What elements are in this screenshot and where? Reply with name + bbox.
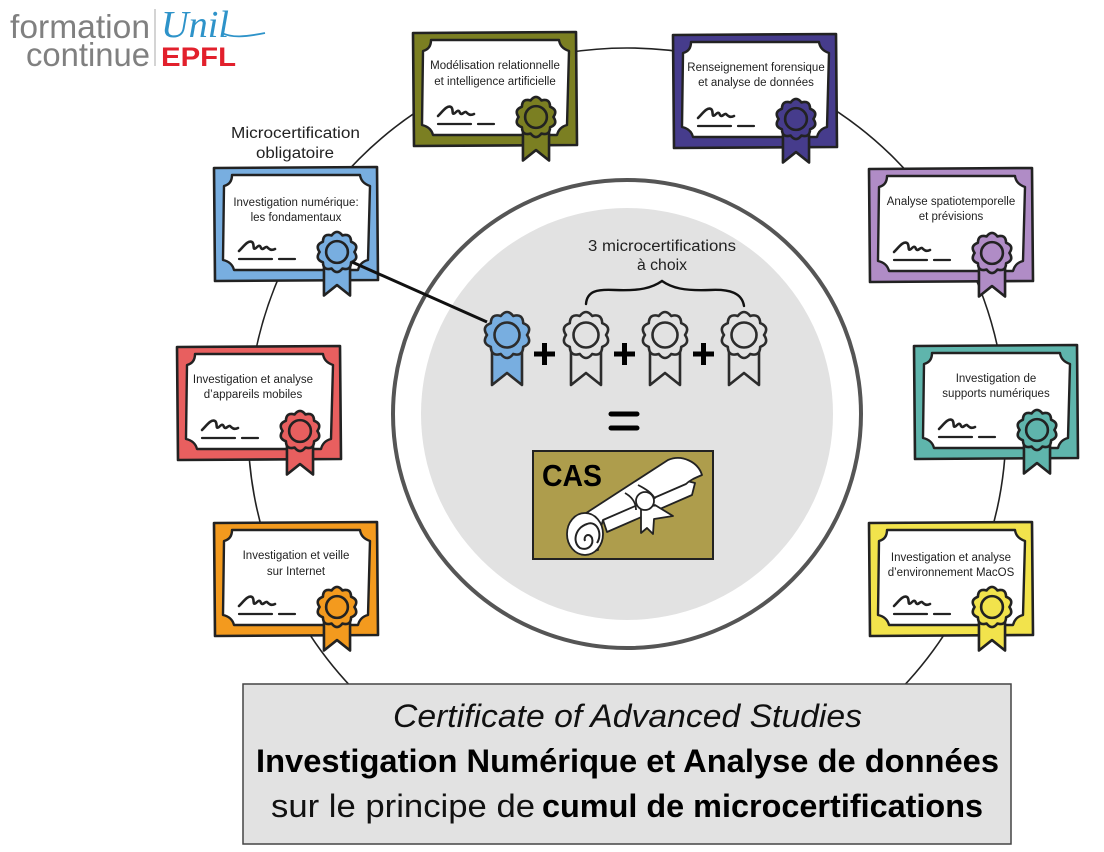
certificate: Renseignement forensique: et analyse de données (698, 77, 814, 89)
bottom title panel (243, 684, 1011, 844)
certificate: environnement MacOS: Investigation et analyse (891, 552, 1011, 564)
certificate: Investigation numérique (mandatory): les fondamentaux (251, 212, 342, 224)
logo: formation continue Unil EPFL: Unil (161, 4, 229, 46)
certificate: appareils mobiles: Investigation et analyse (193, 374, 313, 386)
equation: badges and plus signs (485, 312, 766, 385)
label: mandatory microcertification: obligatoire (256, 145, 334, 162)
connector from mandatory certificate to blue badge (352, 262, 487, 322)
label: mandatory microcertification: Microcertification (231, 125, 360, 142)
certificate: supports numériques: supports numériques (942, 388, 1050, 400)
CAS label: CAS (542, 458, 602, 493)
certificate: Analyse spatiotemporelle (869, 168, 1033, 296)
icon: empty badge 3 (722, 312, 766, 385)
icon: empty badge 1 (564, 312, 608, 385)
equals sign (611, 414, 637, 428)
label: 3 microcertifications à choix: à choix (637, 257, 687, 274)
label: 3 microcertifications à choix: 3 microcertifications (588, 238, 736, 255)
title line: programme name: Investigation Numérique et Analyse de données (256, 743, 999, 779)
certificate: Investigation numérique (mandatory) (214, 167, 378, 296)
logo: formation continue Unil EPFL (10, 4, 265, 73)
logo: formation continue Unil EPFL: continue (26, 36, 150, 73)
plus sign 1 (534, 343, 555, 365)
title line: principle (271, 788, 983, 824)
certificate: Modélisation relationnelle (413, 32, 577, 160)
brace (586, 281, 744, 306)
label: 3 microcertifications à choix (588, 238, 736, 274)
certificate: supports numériques: Investigation de (956, 373, 1036, 385)
central circle (393, 180, 861, 648)
logo: formation continue Unil EPFL: formation (10, 8, 150, 45)
title line: principle: sur le principe de (271, 788, 535, 824)
certificate: Modélisation relationnelle: Modélisation relationnelle (430, 60, 560, 72)
certificate: supports numériques (914, 345, 1078, 474)
certificate: Renseignement forensique (673, 34, 837, 162)
certificate: Renseignement forensique: Renseignement forensique (687, 62, 825, 74)
title line: Certificate of Advanced Studies: Certificate of Advanced Studies (393, 698, 862, 734)
certificate: veille sur Internet: Investigation et veille (243, 550, 349, 562)
plus sign 3 (693, 343, 714, 365)
certificate: appareils mobiles: d’appareils mobiles (204, 389, 302, 401)
certificate: environnement MacOS: d’environnement MacOS (888, 567, 1015, 579)
certificate: Modélisation relationnelle: et intelligence artificielle (434, 76, 556, 88)
certificate: veille sur Internet (214, 522, 378, 650)
certificate: veille sur Internet: sur Internet (267, 566, 326, 578)
CAS panel with diploma (533, 451, 713, 559)
icon: diploma scroll (567, 458, 702, 555)
outer ring connecting the certificates (248, 48, 1006, 806)
label: mandatory microcertification (231, 125, 360, 162)
certificate: Investigation numérique (mandatory): Investigation numérique: (233, 197, 359, 209)
certificate: environnement MacOS (869, 522, 1033, 650)
icon: blue badge (485, 312, 529, 385)
certificate: Analyse spatiotemporelle: Analyse spatiotemporelle (887, 196, 1015, 208)
icon: empty badge 2 (643, 312, 687, 385)
certificate: appareils mobiles (177, 346, 341, 474)
plus sign 2 (614, 343, 635, 365)
title line: principle: cumul de microcertifications (542, 788, 983, 824)
certificate: Analyse spatiotemporelle: et prévisions (919, 211, 984, 223)
logo: formation continue Unil EPFL: EPFL (161, 42, 236, 72)
